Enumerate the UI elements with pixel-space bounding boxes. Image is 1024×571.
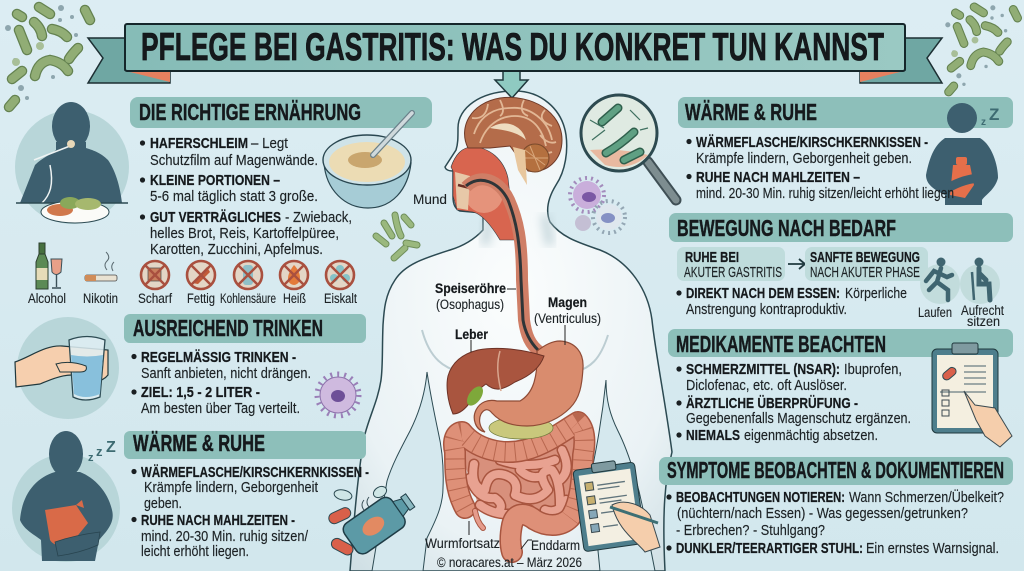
labels: head and chest organs: Leber [455,326,488,342]
text block: Wärme left: geben. [144,495,182,512]
icon: resting person with hot water bottle [12,431,120,562]
labels: head and chest organs: (Osophagus) [436,297,504,312]
text block: Symptome: Ein ernstes Warnsignal. [866,540,999,557]
text block: Trinken: Sanft anbieten, nicht drängen. [141,365,311,382]
text block: Symptome: BEOBACHTUNGEN NOTIEREN: [676,489,845,506]
icon labels row: Alcohol [28,291,66,306]
organ: pancreas [489,417,553,439]
text block: Trinken: Am besten über Tag verteilt. [141,400,300,417]
organ: esophagus [466,179,540,352]
text block: Ernährung: 5-6 mal täglich statt 3 große. [150,188,318,205]
labels: head and chest organs: (Ventriculus) [534,311,601,326]
text block: Ernährung: helles Brot, Reis, Kartoffelpüree, [150,225,339,242]
icon: walking and sitting figures [920,258,1000,304]
panel: Ausreichend Trinken heading: AUSREICHEND TRINKEN [133,315,323,341]
title banner [88,24,942,83]
panel: Bewegung nach Bedarf heading: BEWEGUNG NACH BEDARF [677,215,896,241]
text block: Ernährung: – Legt [251,135,289,152]
text block: Wärme right: RUHE NACH MAHLZEITEN – [696,169,860,186]
labels: movement icons: Laufen [918,305,952,320]
text block: Wärme left: leicht erhöht liegen. [141,543,249,560]
icon: hand holding glass [15,317,119,419]
text block: Medikamente: NIEMALS [686,427,740,444]
labels: lower organs and credit: Enddarm [531,538,580,553]
icon: clipboard with pointing hand [932,343,1012,447]
text block: Ernährung: Karotten, Zucchini, Apfelmus. [150,241,323,258]
labels: movement icons: Aufrecht [961,303,1004,318]
organs: throat and head section [451,147,515,240]
labels: lower organs and credit: © noracares.at – März 2026 [437,555,582,570]
icon: bacteria top left [5,5,90,107]
text block: Wärme left [131,464,369,560]
text block: Medikamente [676,361,911,444]
labels: head and chest organs: Speiseröhre [435,280,506,296]
text block: Ernährung: KLEINE PORTIONEN – [150,172,280,189]
icon: hot water bottle and pills [327,484,421,557]
icon: resting person right: Z [989,105,999,124]
icon: person eating [15,102,129,224]
text block: Wärme left: RUHE NACH MAHLZEITEN - [141,512,295,529]
icon labels row: Fettig [187,291,215,306]
text block: Medikamente: ÄRZTLICHE ÜBERPRÜFUNG - [686,395,858,412]
text block: Ernährung: - Zwieback, [285,209,352,226]
icon: resting person right: z [981,117,986,128]
text block: Ernährung: HAFERSCHLEIM [150,135,248,152]
flow: rest to gentle movement: AKUTER GASTRITIS [684,264,782,281]
icon labels row: Eiskalt [324,291,357,306]
icon: no ice cold [326,261,354,289]
text block: Bewegung: Anstrengung kontraproduktiv. [686,301,847,318]
text block: Bewegung: Körperliche [845,285,907,302]
panel: Wärme & Ruhe heading left: WÄRME & RUHE [133,430,265,456]
icon: bowl of oat gruel [323,113,412,208]
icon labels row: Heiß [283,291,306,306]
text block: Wärme left: Krämpfe lindern, Geborgenheit [144,479,319,496]
organ: intestines [454,422,584,552]
text block: Ernährung [140,135,352,258]
text block: Bewegung: DIREKT NACH DEM ESSEN: [686,285,840,302]
icon: resting person with hot water bottle: Z [106,439,116,456]
text block: Wärme right: WÄRMEFLASCHE/KIRSCHKERNKISSEN - [696,134,928,151]
labels: head and chest organs [413,192,601,342]
text block: Symptome: - Erbrechen? - Stuhlgang? [676,522,825,539]
panel: Wärme & Ruhe heading left [124,430,366,459]
icon: resting person right [926,103,999,205]
icon: cigarette [85,252,117,281]
arrow from title to head [495,70,528,98]
labels: movement icons [918,303,1004,329]
panel: Wärme & Ruhe heading right [678,97,1013,128]
human body outline [350,91,672,571]
panel: Wärme & Ruhe heading right: WÄRME & RUHE [685,99,817,125]
text block: Wärme right: mind. 20-30 Min. ruhig sitzen/leicht erhöht liegen [696,185,954,202]
icon: purple virus [317,374,359,416]
text block: Wärme right [686,134,954,202]
text block: Wärme right: Krämpfe lindern, Geborgenheit geben. [696,150,912,167]
text block: Ernährung: Schutzfilm auf Magenwände. [150,152,318,169]
text block: Wärme left: mind. 20-30 Min. ruhig sitzen/ [141,528,309,545]
text block: Ernährung: GUT VERTRÄGLICHES [150,209,281,226]
icon: white blood cells [570,178,625,233]
icon: resting person with hot water bottle: z [96,444,103,459]
icon: resting person with hot water bottle: z [88,452,94,464]
text block: Medikamente: Gegebenenfalls Magenschutz ergänzen. [686,410,911,427]
icon: no hot [280,261,308,289]
labels: movement icons: sitzen [967,314,1000,329]
labels: lower organs and credit: Wurmfortsatz [425,536,500,551]
flow: rest to gentle movement [677,247,928,281]
icon labels row: Kohlensäure [220,291,276,306]
flow: rest to gentle movement: SANFTE BEWEGUNG [810,249,920,266]
text block: Symptome: DUNKLER/TEERARTIGER STUHL: [676,540,863,557]
panel: Medikamente beachten heading: MEDIKAMENTE BEACHTEN [676,331,886,357]
text block: Bewegung [676,285,907,318]
organ: stomach [474,341,583,432]
icon: bacteria top right [945,5,1018,92]
icon: clipboard with writing hand [572,458,660,552]
text block: Medikamente: Diclofenac, etc. oft Auslöser. [686,377,847,394]
icon: no spicy [141,261,169,289]
icon labels row [28,291,357,306]
flow: rest to gentle movement: RUHE BEI [685,249,739,266]
labels: head and chest organs: Mund [413,192,447,207]
labels: head and chest organs: Magen [548,294,587,310]
text block: Symptome: (nüchtern/nach Essen) - Was gegessen/getrunken? [677,505,968,522]
organ: magnifying glass with bacteria [581,95,676,200]
text block: Wärme left: WÄRMEFLASCHE/KIRSCHKERNKISSEN - [141,464,369,481]
text block: Medikamente: SCHMERZMITTEL (NSAR): [686,361,840,378]
icon: alcohol [36,243,62,289]
text block: Medikamente: Ibuprofen, [844,361,902,378]
icon labels row: Nikotin [83,291,118,306]
organ: brain [465,97,562,185]
text block: Trinken: REGELMÄSSIG TRINKEN - [141,349,296,366]
text block: Medikamente: eigenmächtig absetzen. [744,427,878,444]
text block: Symptome [666,488,1004,557]
icon: small bacteria cluster [376,215,417,258]
labels: lower organs and credit [425,536,582,570]
flow: rest to gentle movement: NACH AKUTER PHASE [810,264,920,281]
icon: no fatty [187,261,215,289]
text block: Trinken: ZIEL: 1,5 - 2 LITER - [141,384,260,401]
panel: Die richtige Ernährung heading: DIE RICHTIGE ERNÄHRUNG [139,99,361,125]
icon labels row: Scharf [138,291,172,306]
text block: Trinken [131,349,311,417]
icon: no carbonated [234,261,262,289]
organ: liver [447,325,565,535]
